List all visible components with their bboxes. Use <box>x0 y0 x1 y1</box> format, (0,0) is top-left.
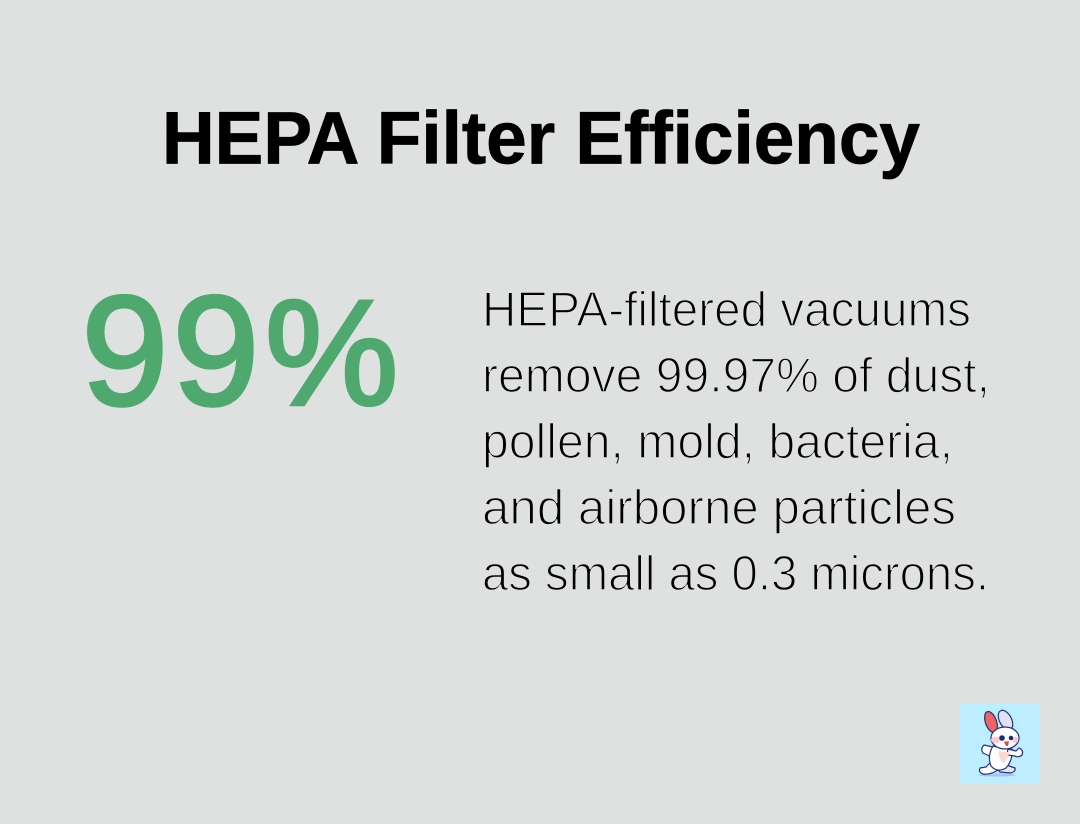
description text: and airborne particles <box>482 481 956 535</box>
statistic: 99%: 9 <box>82 264 168 438</box>
description text: remove 99.97% of dust, <box>482 349 990 403</box>
icon: running rabbit logo <box>960 704 1040 784</box>
description text <box>482 283 990 601</box>
statistic: 99%: 9 <box>172 264 259 438</box>
description text: HEPA-filtered vacuums <box>482 283 971 337</box>
statistic: 99%: % <box>265 268 398 436</box>
description text: as small as 0.3 microns. <box>482 547 989 601</box>
description text: pollen, mold, bacteria, <box>482 415 953 469</box>
title: HEPA Filter Efficiency <box>162 96 920 180</box>
